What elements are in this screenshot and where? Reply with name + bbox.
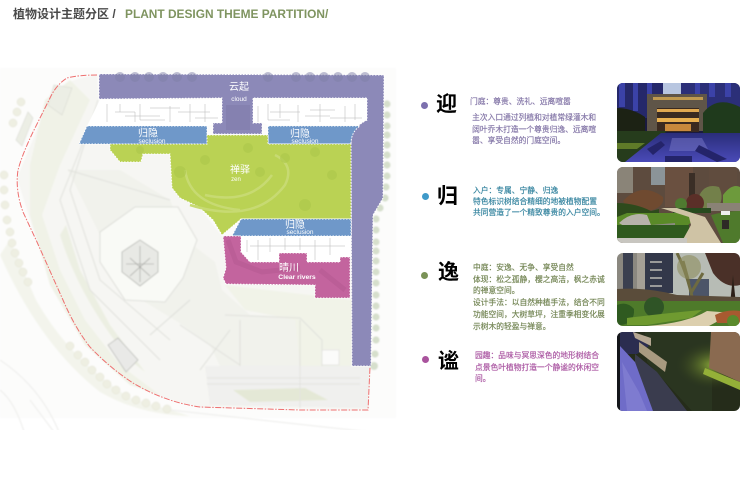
- heading: 归: 归: [437, 185, 458, 208]
- zone labels: cloud: [231, 96, 247, 103]
- white building block: north-west: [87, 100, 222, 126]
- text block: garden: [475, 351, 599, 383]
- photo: entry garden: [617, 167, 740, 243]
- text block: central court: 示树木的轻盈与禅意。: [473, 322, 551, 331]
- text block: gate court: 门庭：尊贵、洗礼、远离喧嚣 主次入口通过列植和对植常绿灌木和: [470, 97, 596, 122]
- zone labels: 归隐: [138, 126, 158, 140]
- heading: 谧: 谧: [438, 350, 459, 373]
- text block: central court: 功能空间，大树草坪，注重季相变化展: [473, 310, 605, 319]
- zone: clear rivers (pink): [223, 236, 350, 298]
- text block: garden: 园趣：品味与冥思深色的地形树结合: [475, 351, 599, 360]
- zone labels: 晴川: [279, 261, 299, 274]
- zone labels: seclusion: [286, 229, 314, 236]
- white building block: north-east: [253, 100, 367, 125]
- heading: 逸: 逸: [438, 261, 459, 284]
- site boundary: [17, 75, 370, 410]
- zone labels: 归隐: [285, 218, 305, 231]
- heading: 迎: 迎: [436, 93, 457, 116]
- icon: purple bullet: [421, 102, 428, 109]
- title: 植物设计主题分区 / PLANT DESIGN THEME PARTITION/: [13, 7, 328, 21]
- zone: seclusion south (blue): [232, 219, 351, 236]
- photo: central court: [617, 253, 740, 326]
- zone: cloud (purple): [99, 72, 384, 366]
- base map: [0, 68, 396, 484]
- text block: entry: 入户：专属、宁静、归逸: [473, 186, 558, 195]
- zone labels: zen: [231, 177, 241, 183]
- text block: entry: 共同营造了一个精致尊贵的入户空间。: [473, 208, 605, 217]
- text block: central court: 中庭：安逸、无争、享受自然: [473, 263, 574, 272]
- text block: central court: [473, 262, 605, 331]
- text block: entry: [473, 186, 605, 217]
- panel: site plan map: [0, 72, 392, 430]
- zone labels: [138, 81, 319, 281]
- zone labels: Clear rivers: [278, 274, 316, 281]
- zone labels: 归隐: [290, 127, 310, 140]
- zone: seclusion north-west (blue): [79, 126, 207, 144]
- zone labels: seclusion: [138, 138, 166, 145]
- zone: seclusion north-east (blue): [268, 126, 360, 144]
- text block: central court: 体现：松之孤静，樱之高洁，枫之赤诚: [473, 275, 605, 284]
- zone labels: 云起: [229, 81, 249, 93]
- photo: gate court at night: [617, 83, 740, 162]
- zone labels: 禅驿: [230, 163, 250, 176]
- zone labels: seclusion: [291, 138, 319, 145]
- text block: entry: 特色标识树结合精细的地被植物配置: [473, 197, 597, 206]
- text block: gate court: 阔叶乔木打造一个尊贵归逸、远离喧: [472, 125, 596, 134]
- icon: green bullet: [421, 272, 428, 279]
- text block: gate court: [470, 97, 596, 145]
- text block: garden: 点景色叶植物打造一个静谧的休闲空: [475, 363, 599, 372]
- photo: garden at dusk: [617, 332, 740, 411]
- text block: garden: 间。: [475, 374, 491, 383]
- icon: magenta bullet: [422, 356, 429, 363]
- icon: blue bullet: [422, 193, 429, 200]
- text block: central court: 设计手法：以自然种植手法，结合不同: [473, 298, 605, 307]
- text block: central court: 的禅意空间。: [473, 286, 520, 295]
- zone: zen (green): [110, 135, 351, 235]
- white building block: south: [241, 236, 351, 262]
- text block: gate court: 嚣、享受自然的门庭空间。: [472, 136, 565, 145]
- trees: [0, 98, 171, 413]
